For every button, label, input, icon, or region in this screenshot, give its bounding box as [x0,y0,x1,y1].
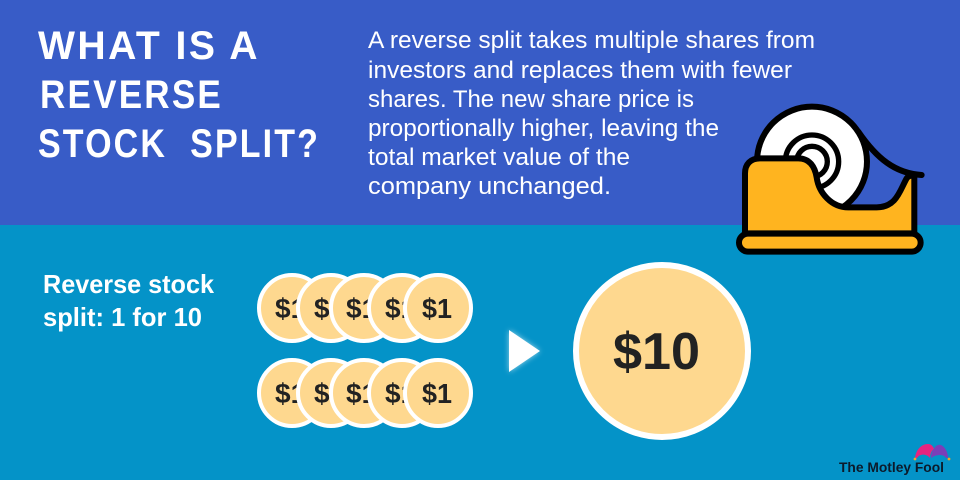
large coin: $10 [576,265,748,437]
tape roll core [797,146,827,177]
text block: definition: proportionally higher, leaving the [368,115,719,142]
tape strip edge [858,132,922,175]
coins: top row: $1 [422,293,452,324]
tape roll inner ring [785,135,839,188]
text block: definition: investors and replaces them with fewer [368,57,792,84]
dispenser base [739,234,921,252]
coins: bottom row [259,360,471,426]
title: REVERSE [40,73,223,117]
label: split ratio [43,269,215,332]
text block: definition [368,27,815,200]
coins: top row: $1 [346,293,377,324]
panel: top header background [0,0,960,225]
arrow [509,330,540,372]
title: STOCK SPLIT? [38,122,320,166]
label: split ratio: Reverse stock [43,269,215,299]
coins: top row: $1 [275,293,306,324]
tape roll [757,107,867,217]
logo: The Motley Fool: The Motley Fool [839,459,944,475]
coins: top row [259,275,471,341]
large coin: $10: $10 [613,323,700,381]
coins: bottom row: $1 [422,378,452,409]
logo: The Motley Fool [839,444,950,475]
coins: top row: $1 [314,293,345,324]
text block: definition: A reverse split takes multiple shares from [368,27,815,54]
label: split ratio: split: 1 for 10 [43,302,202,332]
coins: bottom row: $1 [275,378,306,409]
coins: bottom row: $1 [385,378,416,409]
title [38,24,320,166]
icon: tape dispenser [739,107,922,252]
jester hat [914,444,950,460]
title: WHAT IS A [38,24,260,68]
text block: definition: total market value of the [368,144,630,171]
dispenser body [745,158,914,233]
coins: bottom row: $1 [346,378,377,409]
coins: top row: $1 [385,293,416,324]
text block: definition: company unchanged. [368,173,611,200]
coins: bottom row: $1 [314,378,345,409]
text block: definition: shares. The new share price is [368,86,694,113]
